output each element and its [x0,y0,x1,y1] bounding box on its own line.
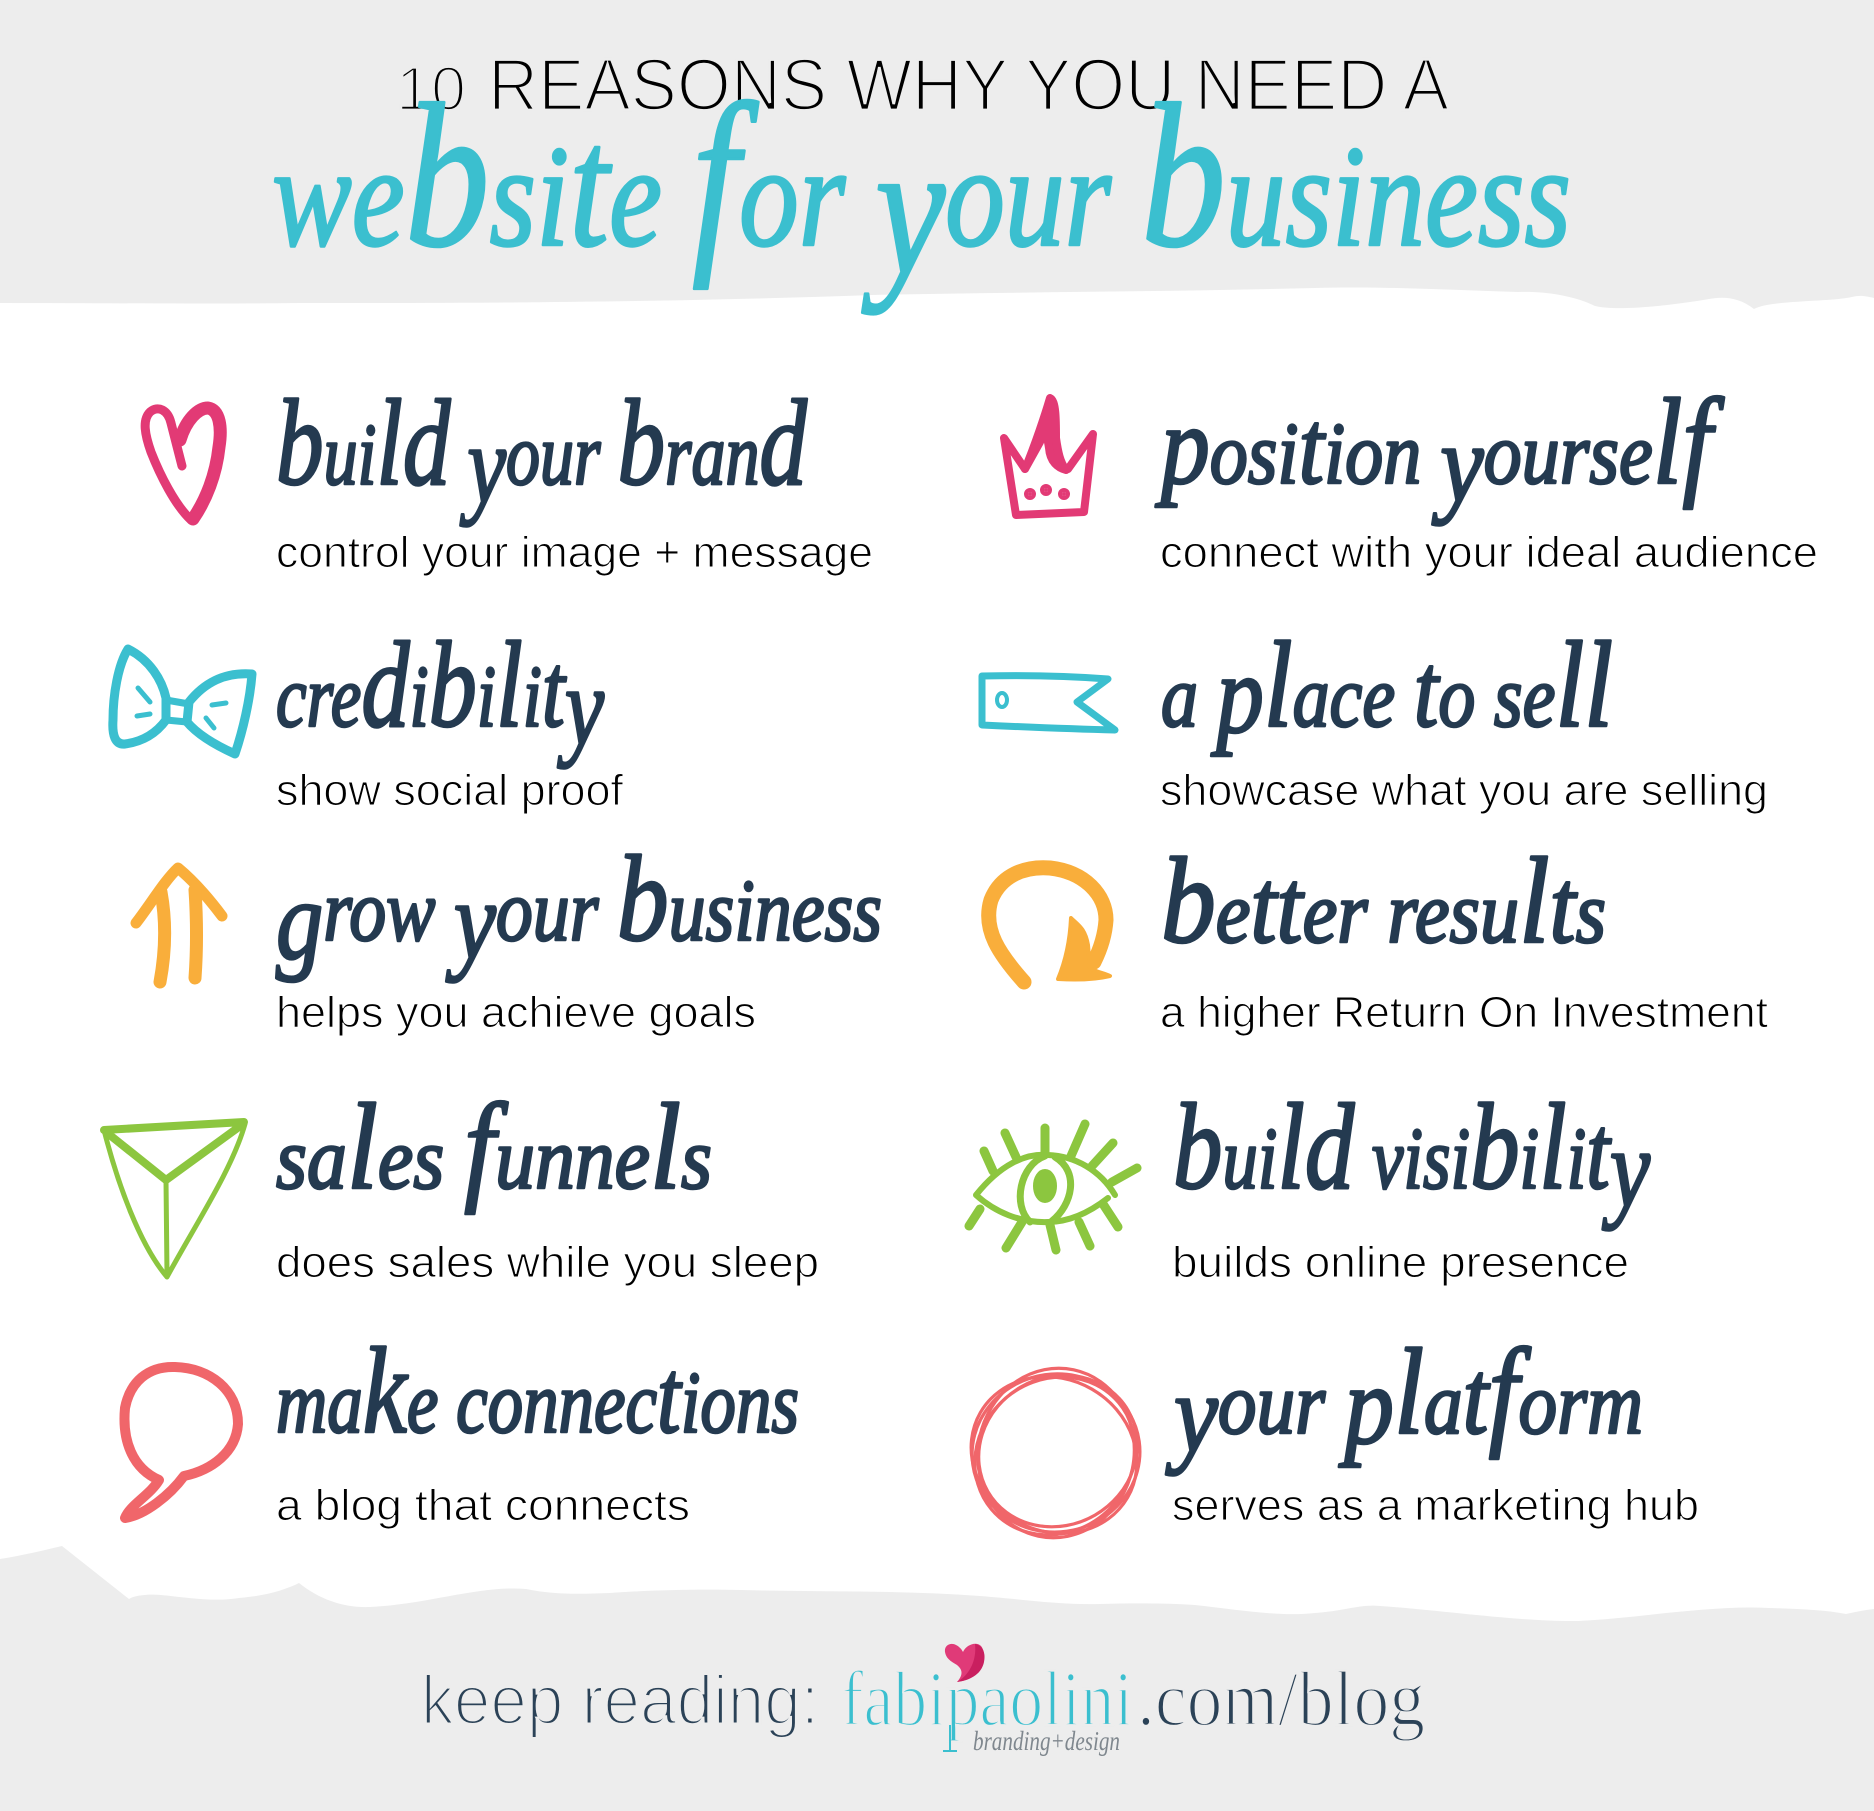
subtext: helps you achieve goals: helps you achieve goals [276,988,756,1037]
subtext: show social proof: show social proof [276,766,624,815]
heading: build visibility: build visibilit [1173,1078,1616,1215]
heading: your platform: y [1165,1352,1219,1476]
subtext: does sales while you sleep: does sales while you sleep [276,1238,819,1287]
title line: 10 reasons why you need a: REASONS WHY YOU NEED A [488,45,1449,126]
icon: bow tie [113,649,252,754]
panel: credibility [113,616,624,815]
heading: build visibility: y [1602,1107,1651,1231]
panel: bottom grey torn-edge band [0,1546,1874,1811]
heading: your platform: atform [1424,1323,1660,1460]
title script: website for your business: website for [272,62,868,290]
heading: build your brand: our [506,407,601,504]
heading: position yourself: ourse [1484,406,1653,503]
panel: make connections [124,1322,799,1530]
heading: a place to sell: a [1161,649,1205,746]
heading: your platform: l [1394,1323,1424,1460]
panel: grow your business [136,830,882,1037]
panel: top grey torn-edge band [0,0,1874,309]
heading: better results: better results [1161,832,1606,969]
heading: grow your business: business [617,830,923,967]
panel: sales funnels [104,1078,819,1287]
footer: keep reading link [421,1644,1425,1756]
title script: website for your business: business [1141,62,1645,290]
icon: logo heart [945,1644,985,1682]
icon: heart [145,408,220,520]
subtext: control your image + message: control your image + message [276,528,873,577]
heading: your platform: our [1218,1356,1326,1453]
heading: a place to sell: l [1264,616,1293,753]
heading: build your brand: build [276,374,472,511]
panel: a place to sell [982,616,1768,815]
logo word: fabipaolini: fabipaolini [841,1655,1133,1742]
heading: position yourself: lf [1653,373,1725,510]
url suffix: .com/blog: .com/blog [1137,1655,1425,1742]
title script: website for your business: our [945,117,1112,277]
heading: a place to sell: p [1211,633,1264,757]
title script: website for your business: y [862,103,946,315]
heading: grow your business: our [496,863,599,960]
icon: price tag [982,676,1115,730]
heading: your platform: p [1338,1344,1394,1468]
footer label: keep reading: keep reading: [421,1661,819,1739]
icon: speech bubble [124,1367,238,1518]
heading: grow your business: y [446,859,497,983]
panel: build your brand [145,374,873,577]
heading: grow your business: g [276,859,323,983]
panel: your platform [942,1323,1699,1568]
icon: funnel [104,1122,245,1277]
panel: position yourself [1004,373,1818,577]
heading: position yourself: y [1432,402,1484,526]
heading: build your brand: y [460,403,507,527]
heading: a place to sell: ace to sell [1293,616,1624,753]
panel: better results [989,832,1768,1037]
subtext: a higher return on investment: a higher Return On Investment [1160,988,1768,1037]
subtext: showcase what you are selling: showcase what you are selling [1160,766,1768,815]
tagline: branding + design: branding+design [973,1726,1120,1756]
icon: scribbled circle [942,1344,1167,1568]
heading: position yourself: position [1161,384,1436,508]
title line: 10 reasons why you need a: 10 [396,55,466,124]
subtext: serves as a marketing hub: serves as a marketing hub [1172,1481,1699,1530]
heading: grow your business: row [323,863,436,960]
heading: credibility: y [557,645,605,769]
heading: make connections: make connections [276,1322,799,1459]
icon: double up arrow [136,868,222,982]
subtext: connect with your ideal audience: connect with your ideal audience [1160,528,1818,577]
heading: build your brand: brand [617,374,821,511]
icon: circular arrow [989,868,1110,982]
heading: sales funnels: sales funnels [276,1078,712,1215]
subtext: a blog that connects: a blog that connects [276,1481,690,1530]
icon: crown [1004,398,1093,515]
icon: eye [969,1124,1137,1250]
subtext: builds online presence: builds online presence [1172,1238,1629,1287]
heading: credibility: credibilit [276,616,571,753]
panel: build visibility [969,1078,1651,1287]
icon: logo p descender [943,1725,957,1751]
